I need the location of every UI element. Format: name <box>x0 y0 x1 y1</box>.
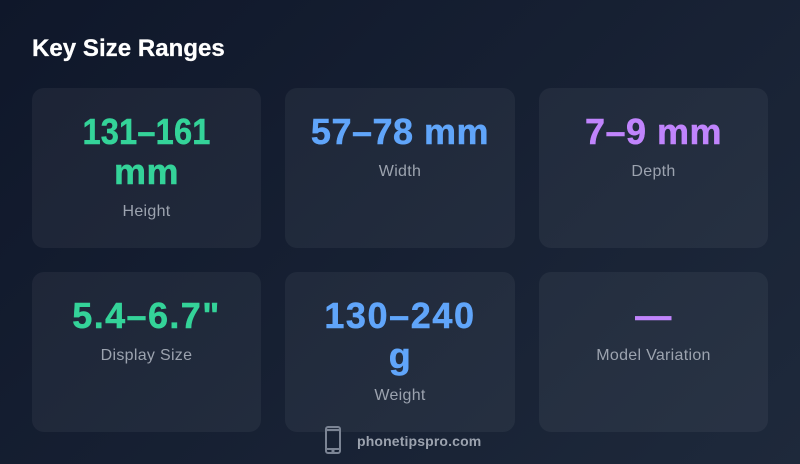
title: Key Size Ranges <box>32 35 225 62</box>
panel: width: 57–78 mm <box>311 111 489 152</box>
panel: model variation: — <box>635 295 672 336</box>
panel: depth <box>539 88 768 248</box>
panel: display size: Display Size <box>101 347 192 364</box>
panel: display size: 5.4–6.7" <box>72 295 221 336</box>
panel: weight: 130–240 <box>324 295 476 336</box>
panel: width <box>285 88 515 248</box>
panel: depth: 7–9 mm <box>585 111 722 152</box>
panel: model variation: Model Variation <box>596 347 711 364</box>
icon: phone <box>325 426 341 454</box>
panel: weight: Weight <box>374 387 426 404</box>
panel: height: Height <box>122 203 171 220</box>
panel: model variation <box>539 272 768 432</box>
panel: height <box>32 88 261 248</box>
panel: weight <box>285 272 515 432</box>
panel: width: Width <box>379 163 421 180</box>
panel: height: 131–161 <box>82 111 211 152</box>
footer brand text: phonetipspro.com <box>357 433 481 449</box>
panel: height: mm <box>114 151 179 192</box>
panel: depth: Depth <box>631 163 676 180</box>
panel: display size <box>32 272 261 432</box>
panel: weight: g <box>389 335 411 376</box>
